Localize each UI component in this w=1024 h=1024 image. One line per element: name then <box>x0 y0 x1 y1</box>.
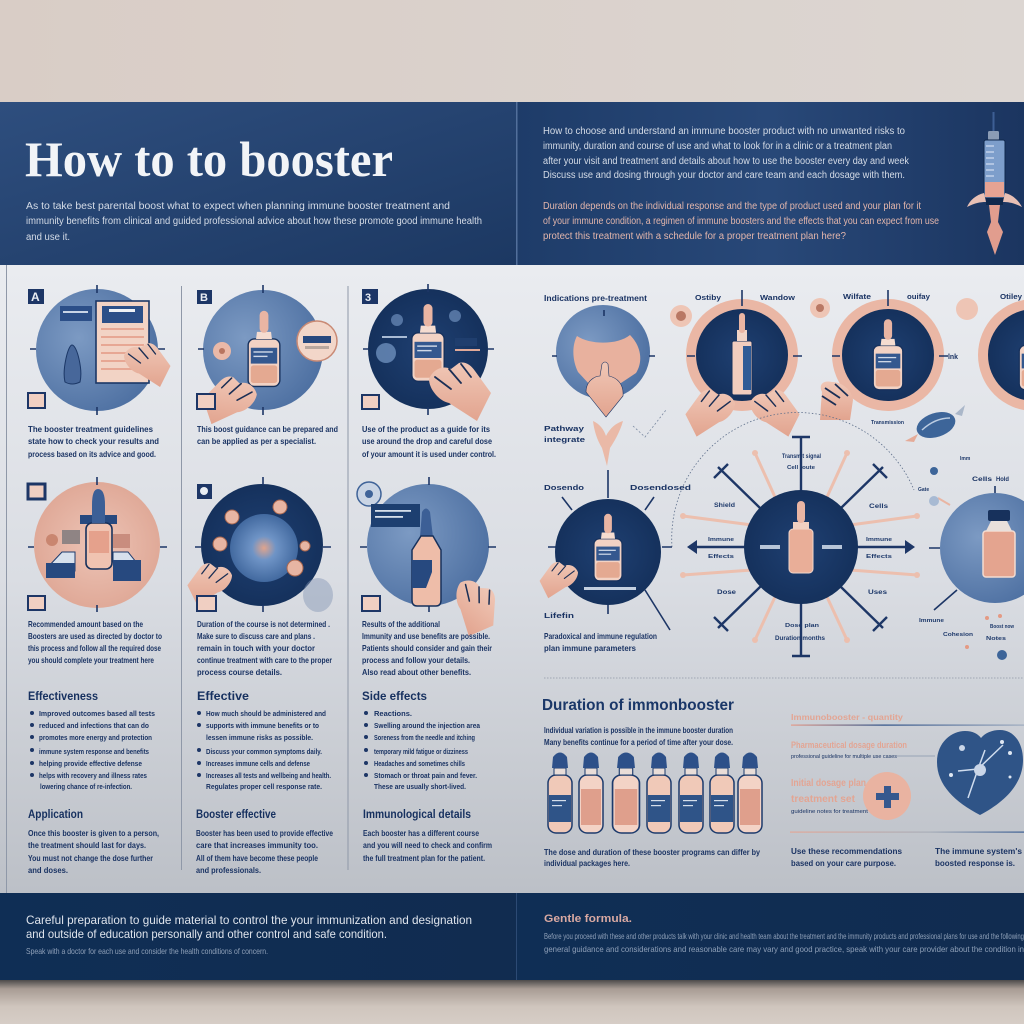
cell core <box>230 514 298 582</box>
bullet list: helping provide effective defense <box>39 759 142 768</box>
text: Results of the additional <box>362 619 440 629</box>
scattered notes: Imm <box>960 456 971 462</box>
step 3 <box>362 284 496 459</box>
footer heading: Gentle formula. <box>544 913 632 925</box>
scattered notes: Cohesion <box>943 632 973 638</box>
duration paragraph <box>543 201 939 242</box>
bullet list: helps with recovery and illness rates <box>39 771 147 780</box>
heading: effectiveness: Effectiveness <box>28 691 98 703</box>
caption: individual packages here. <box>544 858 630 868</box>
small badge <box>197 394 215 409</box>
bullet list <box>366 709 481 791</box>
icon: jar <box>983 510 1015 577</box>
scattered notes: Gate <box>918 487 929 493</box>
bullet list: Discuss your common symptoms daily. <box>206 747 322 756</box>
badge: A <box>31 290 40 304</box>
footer band left <box>0 893 516 980</box>
badge: 3 <box>365 292 371 304</box>
intro: Individual variation is possible in the immune booster duration <box>544 725 733 735</box>
paper panel right <box>516 265 1024 893</box>
text <box>197 619 333 677</box>
caption left: Use these recommendations <box>791 846 902 856</box>
icon: skin dot <box>213 342 231 360</box>
icon: hand <box>540 562 578 598</box>
scattered notes: Cells <box>972 477 993 483</box>
right panel: indications heading: Indications pre-treatment <box>544 293 647 303</box>
heading: administration: Application <box>28 809 83 821</box>
paragraph: Once this booster is given to a person, <box>28 828 159 838</box>
navy spokes <box>692 437 910 656</box>
dotted connectors <box>633 410 666 437</box>
paragraph: the treatment should last for days. <box>28 840 146 850</box>
step 2 <box>197 285 338 446</box>
bullet list: These are usually short-lived. <box>374 782 466 791</box>
small label: Transmission <box>871 420 904 426</box>
document <box>96 301 149 383</box>
text: process and follow your details. <box>362 655 470 665</box>
label: pathway: integrate <box>544 435 585 444</box>
hub labels: Immune <box>708 537 734 543</box>
header paragraph: Discuss use and dosing through your doctor and care team and each dosage with them. <box>543 170 905 181</box>
text: Boosters are used as directed by doctor to <box>28 631 162 641</box>
icon: heart <box>937 730 1023 815</box>
hub labels: Cells <box>869 504 889 510</box>
icon: bottle <box>594 514 622 581</box>
icon: bottle <box>873 319 903 390</box>
info card <box>371 504 420 527</box>
label <box>791 777 869 815</box>
background top <box>0 0 1024 102</box>
scattered notes: Notes <box>986 636 1006 642</box>
paragraph <box>196 828 333 875</box>
label: Pharmaceutical dosage duration <box>791 740 907 751</box>
bullet list: Regulates proper cell response rate. <box>206 782 322 791</box>
label left: Dosendo <box>544 483 585 492</box>
header paragraph: immunity, duration and course of use and what to look for in a clinic or a treatment plan <box>543 141 892 152</box>
paragraph <box>363 828 492 863</box>
paragraph: Booster has been used to provide effective <box>196 828 333 838</box>
duration paragraph: of your immune condition, a regimen of immune boosters and the effects that you can expect from use <box>543 216 939 227</box>
paragraph: and professionals. <box>196 865 261 875</box>
icon: fist <box>820 381 853 420</box>
text: Make sure to discuss care and plans . <box>197 631 315 641</box>
hub labels: Shield <box>714 503 735 509</box>
ring C <box>810 290 948 426</box>
icon: capsule lens <box>905 405 965 443</box>
text <box>28 424 159 459</box>
text <box>28 619 162 665</box>
icon: bottle <box>412 508 441 606</box>
bullet list: reduced and infections that can do <box>39 721 149 730</box>
icon: dropper bottle <box>248 311 280 386</box>
bullet list: lessen immune risks as possible. <box>206 733 313 742</box>
heading: Duration of immonbooster <box>542 697 734 714</box>
step 6 <box>357 477 510 677</box>
icon: hand <box>438 572 510 644</box>
paragraph: care that increases immunity too. <box>196 840 318 850</box>
labels: Wilfate <box>843 292 871 301</box>
step 4 <box>28 477 167 665</box>
label: treatment set <box>791 793 855 805</box>
text: Immunity and use benefits are possible. <box>362 631 490 641</box>
caption <box>584 587 636 590</box>
bullet list: lowering chance of re-infection. <box>40 782 132 791</box>
text: Recommended amount based on the <box>28 619 143 629</box>
hub diagram <box>672 413 920 656</box>
text: this process and follow all the required dose <box>28 643 161 653</box>
caption left <box>791 846 902 868</box>
side labels <box>46 515 130 548</box>
salmon rays <box>683 453 917 640</box>
duration section <box>542 697 762 868</box>
circle <box>36 289 158 411</box>
bullet list: temporary mild fatigue or dizziness <box>374 747 468 756</box>
small badge <box>362 596 380 611</box>
badge <box>197 290 212 304</box>
text: remain in touch with your doctor <box>197 643 316 653</box>
circle <box>34 482 160 608</box>
ring dots <box>213 500 310 576</box>
caption: The dose and duration of these booster programs can differ by <box>544 847 760 857</box>
caption left: based on your care purpose. <box>791 858 896 868</box>
bullet list: Stomach or throat pain and fever. <box>374 771 477 780</box>
hub labels: Effects <box>866 554 892 560</box>
side dot <box>810 298 830 318</box>
heading: booster effects: Booster effective <box>196 809 276 821</box>
ring C: ouifay <box>907 292 931 301</box>
capsule <box>64 345 81 384</box>
column 2 details <box>196 691 333 875</box>
header paragraph: after your visit and treatment and details about how to use the booster every day and week <box>543 156 910 167</box>
icon: hand <box>124 343 170 387</box>
footer band left: and outside of education personally and other control and safe condition. <box>26 927 387 941</box>
cell details <box>376 310 480 363</box>
paragraph: the full treatment plan for the patient. <box>363 853 485 863</box>
diagram: face circle <box>552 305 655 417</box>
caption <box>544 847 760 868</box>
header paragraph: How to choose and understand an immune booster product with no unwanted risks to <box>543 126 905 137</box>
icon: salmon arrow <box>593 421 623 466</box>
small badge <box>362 395 379 409</box>
duration paragraph: Duration depends on the individual response and the type of product used and your plan for it <box>543 201 921 212</box>
icon: dropper bottle <box>412 304 444 381</box>
icon: plus <box>863 772 911 820</box>
paragraph: All of them have become these people <box>196 853 318 863</box>
icon: bottle <box>789 501 813 573</box>
header paragraph <box>543 126 910 181</box>
small badge <box>197 596 216 611</box>
step 5 <box>187 477 333 677</box>
label: Initial dosage plan <box>791 777 866 789</box>
circle <box>201 484 323 606</box>
circle <box>367 484 489 606</box>
circle <box>368 289 488 409</box>
bullet list: Increases immune cells and defense <box>206 759 310 768</box>
bullet list <box>199 709 331 791</box>
footer band right <box>516 893 1024 980</box>
intro text: and use it. <box>26 232 70 243</box>
badge <box>362 289 378 304</box>
icon: hands <box>685 390 735 437</box>
header band right <box>516 102 1024 265</box>
column 1 details <box>28 691 159 875</box>
hub labels: Duration months <box>775 636 826 642</box>
text: can be applied as per a specialist. <box>197 436 316 446</box>
bullet list: Reactions. <box>374 709 412 718</box>
hub labels: Effects <box>708 554 734 560</box>
intro text: As to take best parental boost what to expect when planning immune booster treatment and <box>26 201 450 212</box>
ring D <box>948 292 1024 411</box>
icon: hand <box>586 362 623 417</box>
paragraph: plan immune parameters <box>544 643 636 653</box>
icon: syringe <box>967 112 1022 255</box>
bullet list <box>32 709 155 791</box>
label right: Dosendosed <box>630 483 692 492</box>
text: This boost guidance can be prepared and <box>197 424 338 434</box>
label: Immunobooster - quantity <box>791 712 903 722</box>
hub labels: Uses <box>868 590 888 596</box>
text: The booster treatment guidelines <box>28 424 153 434</box>
hub labels: Dose plan <box>785 623 819 629</box>
bullet list: Soreness from the needle and itching <box>374 733 475 742</box>
caption right: The immune system's <box>935 846 1022 856</box>
hub labels: Immune <box>866 537 892 543</box>
paragraph: and you will need to check and confirm <box>363 840 492 850</box>
benefits panel <box>790 712 1024 868</box>
benefits panel: professional guideline for multiple use cases <box>791 754 898 760</box>
bullet list: Swelling around the injection area <box>374 721 481 730</box>
caption right <box>935 846 1022 868</box>
label: guideline notes for treatment <box>791 809 869 815</box>
footer band left: Speak with a doctor for each use and consider the health conditions of concern. <box>26 946 268 956</box>
text: you should complete your treatment here <box>28 655 154 665</box>
ring D: lnk <box>948 352 959 361</box>
bullet list: Headaches and sometimes chills <box>374 759 465 768</box>
circle <box>203 290 323 410</box>
text: use around the drop and careful dose <box>362 436 492 446</box>
text <box>197 424 338 446</box>
text: Duration of the course is not determined . <box>197 619 330 629</box>
text: state how to check your results and <box>28 436 159 446</box>
dotted orbit <box>672 413 914 547</box>
text: process course details. <box>197 667 282 677</box>
paragraph: You must not change the dose further <box>28 853 154 863</box>
icon: vial <box>86 489 112 569</box>
icon: lens badge <box>357 482 381 506</box>
ring B <box>670 290 802 437</box>
icon: bottle <box>1019 319 1024 390</box>
background bottom <box>0 980 1024 1024</box>
text: process based on its advice and good. <box>28 449 156 459</box>
icon: hand <box>187 563 232 605</box>
vials row <box>548 752 762 833</box>
bullet list: supports with immune benefits or to <box>206 721 319 730</box>
scattered notes: Immune <box>919 618 944 624</box>
hub labels: Cell route <box>787 465 815 471</box>
icon: hand <box>429 362 491 421</box>
bullet list: Increases all tests and wellbeing and health. <box>206 771 331 780</box>
intro: Many benefits continue for a period of time after your dose. <box>544 737 733 747</box>
step 1 <box>28 285 170 459</box>
paragraph: Paradoxical and immune regulation <box>544 631 657 641</box>
label below: Lifefin <box>544 611 575 620</box>
intro <box>544 725 733 747</box>
text <box>362 424 496 459</box>
small badge <box>28 393 45 408</box>
badge <box>28 289 44 304</box>
circle E <box>540 470 692 653</box>
scattered notes: Boost now <box>990 624 1014 630</box>
duration paragraph: protect this treatment with a schedule for a proper treatment plan here? <box>543 231 846 242</box>
section divider <box>544 677 1024 679</box>
text: of your amount it is used under control. <box>362 449 496 459</box>
bullet list: Improved outcomes based all tests <box>39 709 155 718</box>
heading: side effects: Side effects <box>362 691 427 703</box>
paragraph <box>28 828 159 875</box>
text: Also read about other benefits. <box>362 667 471 677</box>
icon: boxes <box>46 552 141 581</box>
central circle <box>744 490 858 604</box>
footer text: Careful preparation to guide material to control the your immunization and designation <box>26 913 472 927</box>
end dots <box>680 450 920 643</box>
heading: immunological details: Immunological details <box>363 809 471 821</box>
hub labels: Dose <box>717 590 737 596</box>
ring B: Wandow <box>760 293 795 302</box>
heading: effective: Effective <box>197 691 249 703</box>
badge: B <box>200 292 208 304</box>
label: pathway <box>544 424 585 444</box>
text: Patients should consider and gain their <box>362 643 493 653</box>
bullet list: immune system response and benefits <box>39 747 149 756</box>
smudge <box>303 578 333 612</box>
paper panel left <box>0 265 516 893</box>
hub labels: Transmit signal <box>782 454 821 460</box>
column dividers <box>6 265 348 893</box>
header band left <box>0 102 516 265</box>
hub labels <box>708 454 892 642</box>
small label <box>60 306 92 321</box>
label: pathway: Pathway <box>544 424 585 433</box>
badge <box>28 484 45 499</box>
scattered notes: Hold <box>996 477 1009 483</box>
bullet list: How much should be administered and <box>206 709 326 718</box>
circle G <box>929 486 1024 610</box>
paragraph: Each booster has a different course <box>363 828 479 838</box>
intro text: immunity benefits from clinical and guided professional advice about how these promote good immune health <box>26 216 482 227</box>
column 3 details <box>362 691 492 863</box>
icon: slim vial <box>732 313 752 395</box>
labels: Ostiby <box>695 293 722 302</box>
intro text <box>26 201 482 243</box>
side dot <box>670 305 692 327</box>
icon: hand <box>200 373 259 430</box>
caption right: boosted response is. <box>935 858 1015 868</box>
badge <box>197 484 212 499</box>
small badge <box>28 596 45 610</box>
paragraph: and doses. <box>28 865 68 875</box>
icon: round seal <box>297 321 337 361</box>
text <box>362 619 493 677</box>
text: Use of the product as a guide for its <box>362 424 490 434</box>
text: continue treatment with care to the proper <box>197 655 333 665</box>
skin shape <box>573 335 640 385</box>
paragraph <box>544 631 657 653</box>
side dot <box>956 298 978 320</box>
labels: Otiley <box>1000 292 1023 301</box>
bullet list: promotes more energy and protection <box>39 733 152 742</box>
scattered notes <box>918 456 1014 660</box>
arrow heads <box>687 540 915 554</box>
title: How to to booster <box>25 131 393 187</box>
